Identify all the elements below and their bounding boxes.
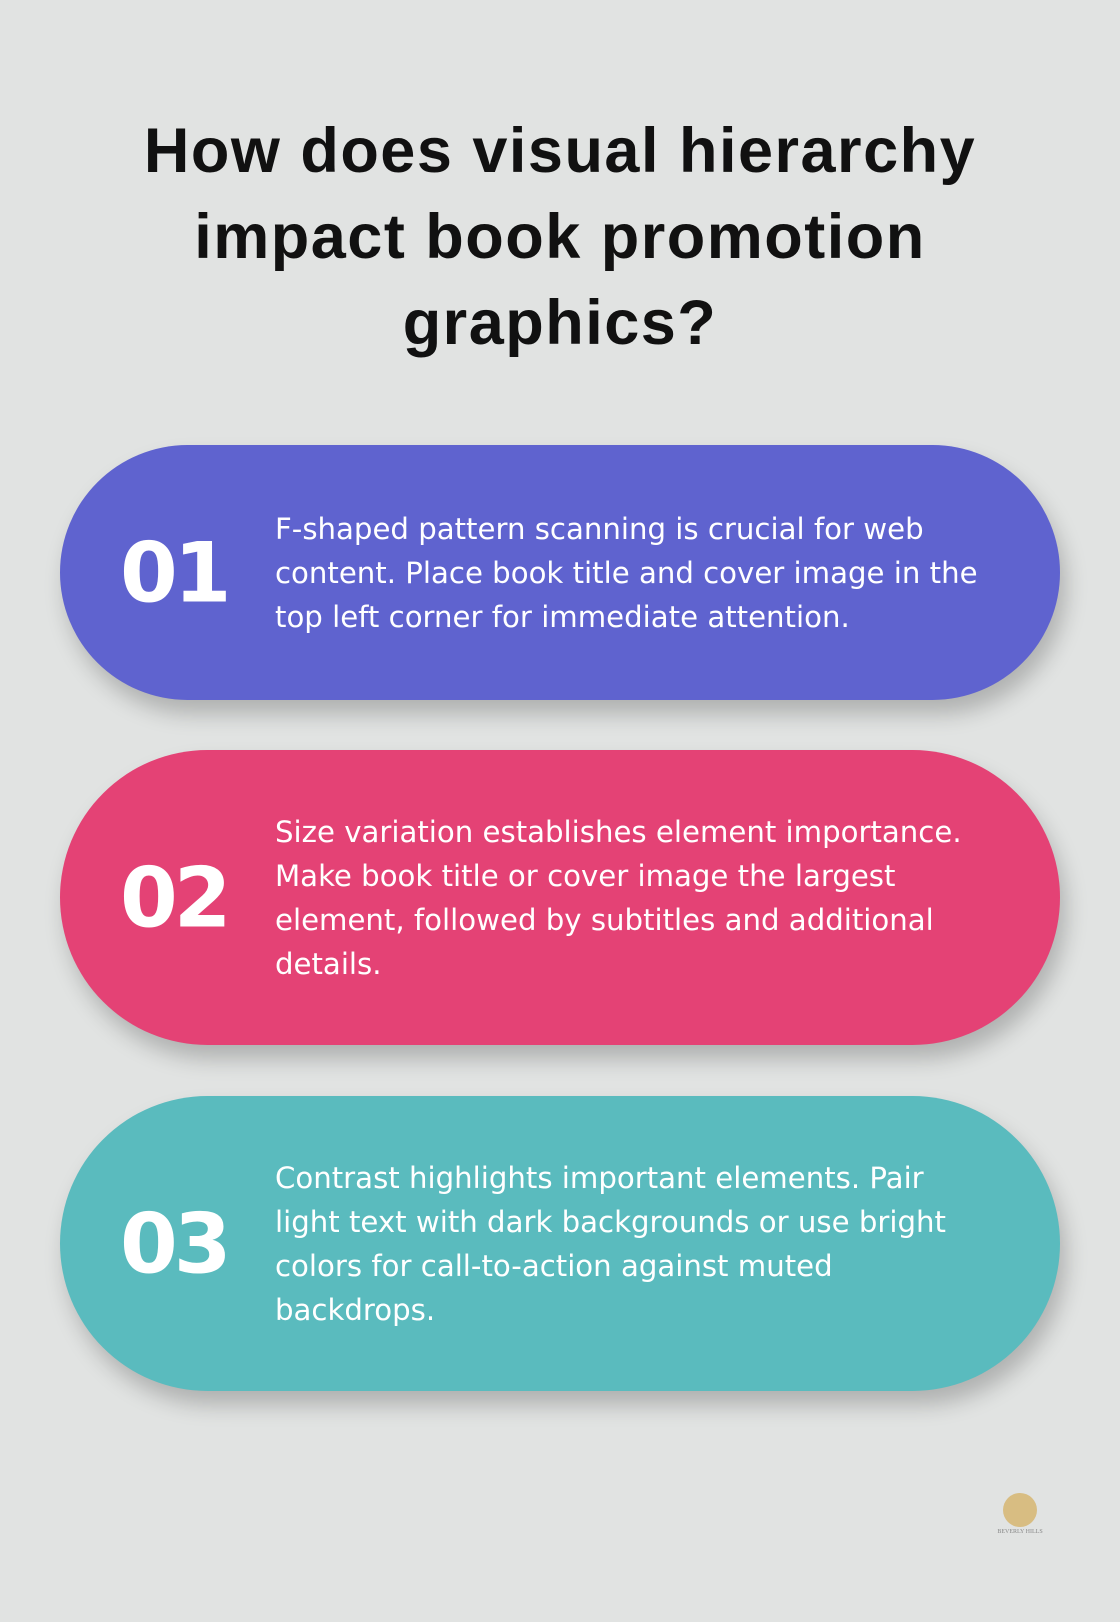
number 02: 02 xyxy=(120,849,228,946)
text 03: backdrops. xyxy=(275,1292,435,1326)
text 01: top left corner for immediate attention. xyxy=(275,600,850,634)
text 01 xyxy=(275,512,978,634)
title: impact book promotion xyxy=(194,202,926,272)
panel: 01 xyxy=(60,445,1060,700)
text 01: F-shaped pattern scanning is crucial for web xyxy=(275,512,924,546)
text 02: details. xyxy=(275,946,382,980)
title xyxy=(144,116,976,358)
text 02: Size variation establishes element importance. xyxy=(275,814,962,848)
text 03: light text with dark backgrounds or use bright xyxy=(275,1204,946,1238)
text 01: content. Place book title and cover image in the xyxy=(275,556,978,590)
number 01: 01 xyxy=(120,524,228,621)
text 03: colors for call-to-action against muted xyxy=(275,1248,833,1282)
title: graphics? xyxy=(403,288,717,358)
panel: 02 xyxy=(60,750,1060,1045)
title: How does visual hierarchy xyxy=(144,116,976,186)
text 03 xyxy=(275,1160,946,1326)
text 02: Make book title or cover image the largest xyxy=(275,858,895,892)
text 02 xyxy=(275,814,962,980)
number 03: 03 xyxy=(120,1195,228,1292)
text 03: Contrast highlights important elements. Pair xyxy=(275,1160,924,1194)
logo xyxy=(997,1493,1043,1535)
text 02: element, followed by subtitles and additional xyxy=(275,902,934,936)
logo: BEVERLY HILLS xyxy=(997,1529,1043,1535)
panel: 03 xyxy=(60,1096,1060,1391)
